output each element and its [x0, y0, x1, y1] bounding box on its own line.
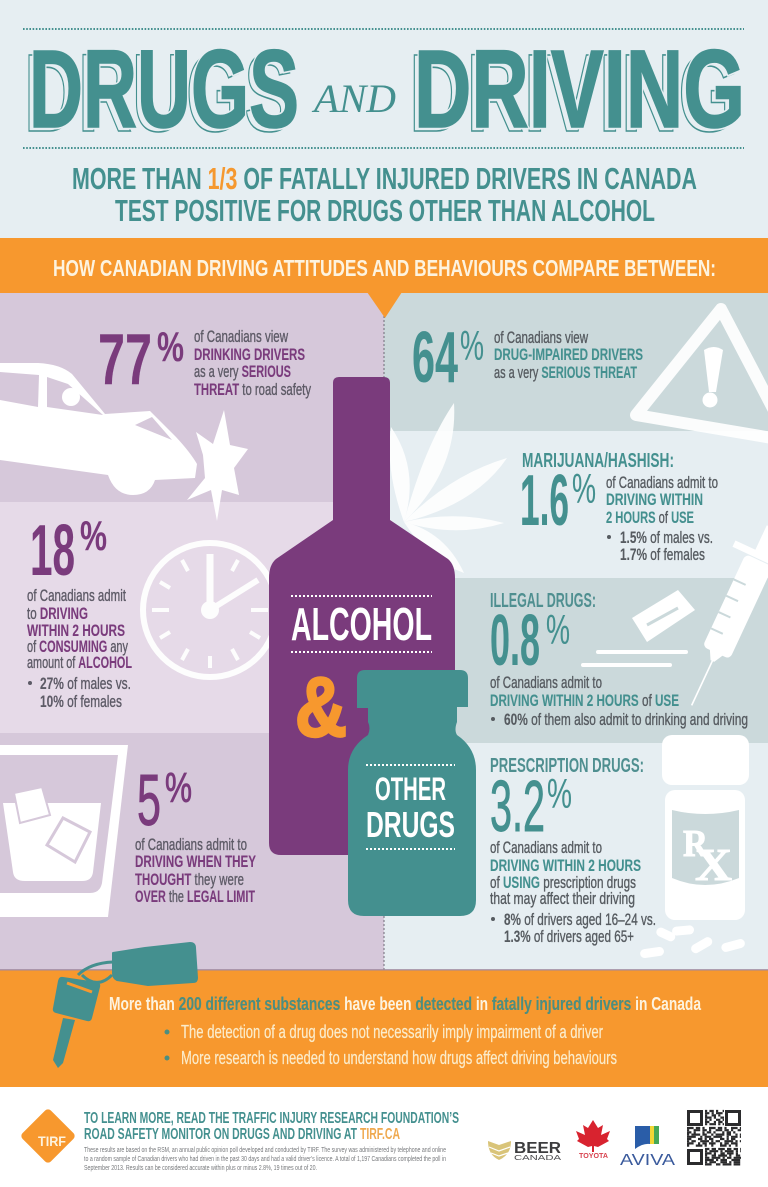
left panel: alcohol background bands — [0, 292, 384, 971]
stat: marijuana and hashish: 1.5% of males vs. — [620, 529, 713, 547]
stat: prescription drugs: DRIVING WITHIN 2 HOURS — [490, 857, 641, 875]
stat: marijuana and hashish — [520, 450, 718, 564]
stat: illegal drugs: % — [546, 606, 570, 653]
stat: 18 percent: 27% of males vs. — [40, 675, 131, 693]
stat: marijuana and hashish: 1.7% of females — [620, 546, 705, 564]
stat: marijuana and hashish: DRIVING WITHIN — [606, 491, 703, 509]
stat: 18 percent: of CONSUMING any — [27, 638, 128, 656]
stat: 64 percent: DRUG-IMPAIRED DRIVERS — [494, 346, 643, 364]
stat: prescription drugs: PRESCRIPTION DRUGS: — [490, 755, 644, 777]
label: other drugs: OTHER — [375, 771, 446, 807]
stat: 18 percent: % — [80, 512, 107, 559]
callout bullet 2: More research is needed to understand how drugs affect driving behaviours — [181, 1048, 617, 1068]
stat: 18 percent: amount of ALCOHOL — [27, 654, 132, 672]
stat: 18 percent: to DRIVING — [27, 605, 88, 623]
footer fine print: These results are based on the RSM, an annual public opinion poll developed and conducted by TIRF. The survey was administered by telephone and online — [84, 1147, 446, 1154]
stat: marijuana and hashish: of Canadians admit to — [606, 474, 718, 492]
alcohol bottle — [269, 377, 455, 855]
logo: TIRF diamond — [20, 1108, 76, 1164]
stat: 5 percent: THOUGHT they were — [135, 871, 244, 889]
stat: prescription drugs: 8% of drivers aged 16–24 vs. — [504, 911, 656, 929]
footer fine print: to a random sample of Canadian drivers who had driven in the past 30 days and had a valid driver’s licence. A total of 1,197 Canadians completed the poll in — [84, 1156, 446, 1163]
stat: 5 percent: DRIVING WHEN THEY — [135, 853, 256, 871]
stat: 64 percent: 64 — [412, 318, 458, 398]
stat: 18 percent: of Canadians admit — [27, 587, 126, 605]
icon: crashed car — [0, 363, 197, 495]
title shadow outline: DRUGS — [24, 32, 294, 155]
ampersand: & — [295, 660, 347, 754]
stat: 18 percent: 10% of females — [40, 693, 122, 711]
logo: Beer Canada — [488, 1140, 561, 1162]
logo: Aviva: AVIVA — [620, 1152, 676, 1169]
label: other drugs — [366, 771, 455, 845]
stat: prescription drugs: % — [547, 770, 572, 817]
label: alcohol: ALCOHOL — [291, 598, 432, 650]
stat: 5 percent — [135, 761, 256, 906]
title gap around lettering: DRUGS — [29, 28, 299, 151]
stat: 77 percent: % — [157, 323, 184, 370]
stat: prescription drugs: of USING prescription drugs — [490, 874, 636, 892]
icon: prescription bottle and pills — [640, 735, 749, 959]
stat: illegal drugs: ILLEGAL DRUGS: — [490, 590, 596, 612]
callout bullet 1: The detection of a drug does not necessarily imply impairment of a driver — [181, 1022, 603, 1042]
header background — [0, 0, 768, 240]
title gap around lettering — [29, 28, 745, 151]
stat: illegal drugs: 0.8 — [490, 601, 540, 681]
stat: 77 percent: 77 — [98, 320, 152, 400]
stat: prescription drugs: 3.2 — [490, 767, 545, 847]
stat: 18 percent: 18 — [30, 511, 75, 591]
icon: syringe — [664, 516, 768, 718]
stat: marijuana and hashish: % — [572, 465, 596, 512]
stat: marijuana and hashish: 2 HOURS of USE — [606, 509, 694, 527]
logo: Aviva — [620, 1126, 676, 1169]
icon: prescription bottle and pills: R — [683, 823, 708, 865]
stat: 64 percent: of Canadians view — [494, 329, 588, 347]
stat: illegal drugs — [490, 590, 748, 729]
callout headline: More than 200 different substances have been detected in fatally injured drivers in Canada — [109, 993, 702, 1014]
stat: 77 percent: DRINKING DRIVERS — [194, 346, 305, 364]
stat: prescription drugs: of Canadians admit to — [490, 839, 602, 857]
stat: marijuana and hashish: 1.6 — [520, 461, 569, 541]
icon: cannabis leaf — [390, 403, 507, 573]
stat: 77 percent: as a very SERIOUS — [194, 363, 291, 381]
stat: marijuana and hashish: MARIJUANA/HASHISH: — [522, 450, 674, 472]
bottom orange callout — [0, 969, 768, 1087]
stat: 77 percent: of Canadians view — [194, 328, 288, 346]
footer call to action — [84, 1110, 459, 1143]
icon: prescription bottle and pills: X — [695, 839, 732, 890]
stat: 64 percent: % — [460, 322, 484, 369]
stat: prescription drugs: 1.3% of drivers aged 65+ — [504, 928, 634, 946]
stat: prescription drugs: that may affect their driving — [490, 890, 635, 908]
logo: Toyota maple leaf — [576, 1120, 610, 1160]
title AND: AND — [311, 76, 396, 121]
stat: 5 percent: of Canadians admit to — [135, 836, 247, 854]
footer call to action: TO LEARN MORE, READ THE TRAFFIC INJURY RESEARCH FOUNDATION’S — [84, 1110, 459, 1127]
icon: car key and fob — [53, 943, 197, 1068]
orange banner — [0, 238, 768, 318]
stat: 5 percent: OVER the LEGAL LIMIT — [135, 888, 255, 906]
footer fine print: September 2013. Results can be considered accurate within plus or minus 2.8%, 19 times out of 20. — [84, 1165, 317, 1172]
title main lettering: DRUGS — [29, 28, 299, 151]
icon: crash burst — [187, 410, 248, 521]
logo: TIRF diamond: TIRF — [38, 1133, 66, 1149]
logo: Beer Canada: CANADA — [514, 1153, 561, 1162]
QR code — [687, 1111, 741, 1164]
stat: prescription drugs — [490, 755, 656, 946]
title shadow outline — [24, 32, 740, 155]
stat: 5 percent: % — [165, 764, 192, 811]
footer fine print — [84, 1147, 446, 1172]
icon: razor blade and powder lines — [583, 590, 695, 665]
stat: 77 percent — [98, 320, 312, 400]
footer background — [0, 1087, 768, 1187]
logo: Beer Canada: BEER — [514, 1140, 561, 1157]
label: other drugs: DRUGS — [366, 804, 455, 845]
title main lettering — [29, 28, 745, 151]
icon: clock — [143, 543, 277, 677]
icon: warning triangle — [636, 309, 768, 441]
subtitle — [72, 161, 697, 228]
stat: 64 percent: as a very SERIOUS THREAT — [494, 364, 637, 382]
stat: illegal drugs: of Canadians admit to — [490, 674, 602, 692]
stat: 77 percent: THREAT to road safety — [194, 381, 312, 399]
right panel: other drugs background bands — [384, 292, 768, 971]
stat: 18 percent: WITHIN 2 HOURS — [27, 622, 125, 640]
other drugs bottle — [348, 670, 476, 916]
logo: Toyota maple leaf: TOYOTA — [579, 1151, 609, 1160]
stat: 5 percent: 5 — [137, 761, 161, 841]
title — [24, 28, 745, 155]
stat: 64 percent — [412, 318, 643, 398]
stat: 18 percent — [27, 511, 132, 711]
stat: illegal drugs: DRIVING WITHIN 2 HOURS of USE — [490, 692, 679, 710]
footer call to action: ROAD SAFETY MONITOR ON DRUGS AND DRIVING AT TIRF.CA — [84, 1126, 400, 1143]
icon: whisky glass — [0, 745, 128, 917]
